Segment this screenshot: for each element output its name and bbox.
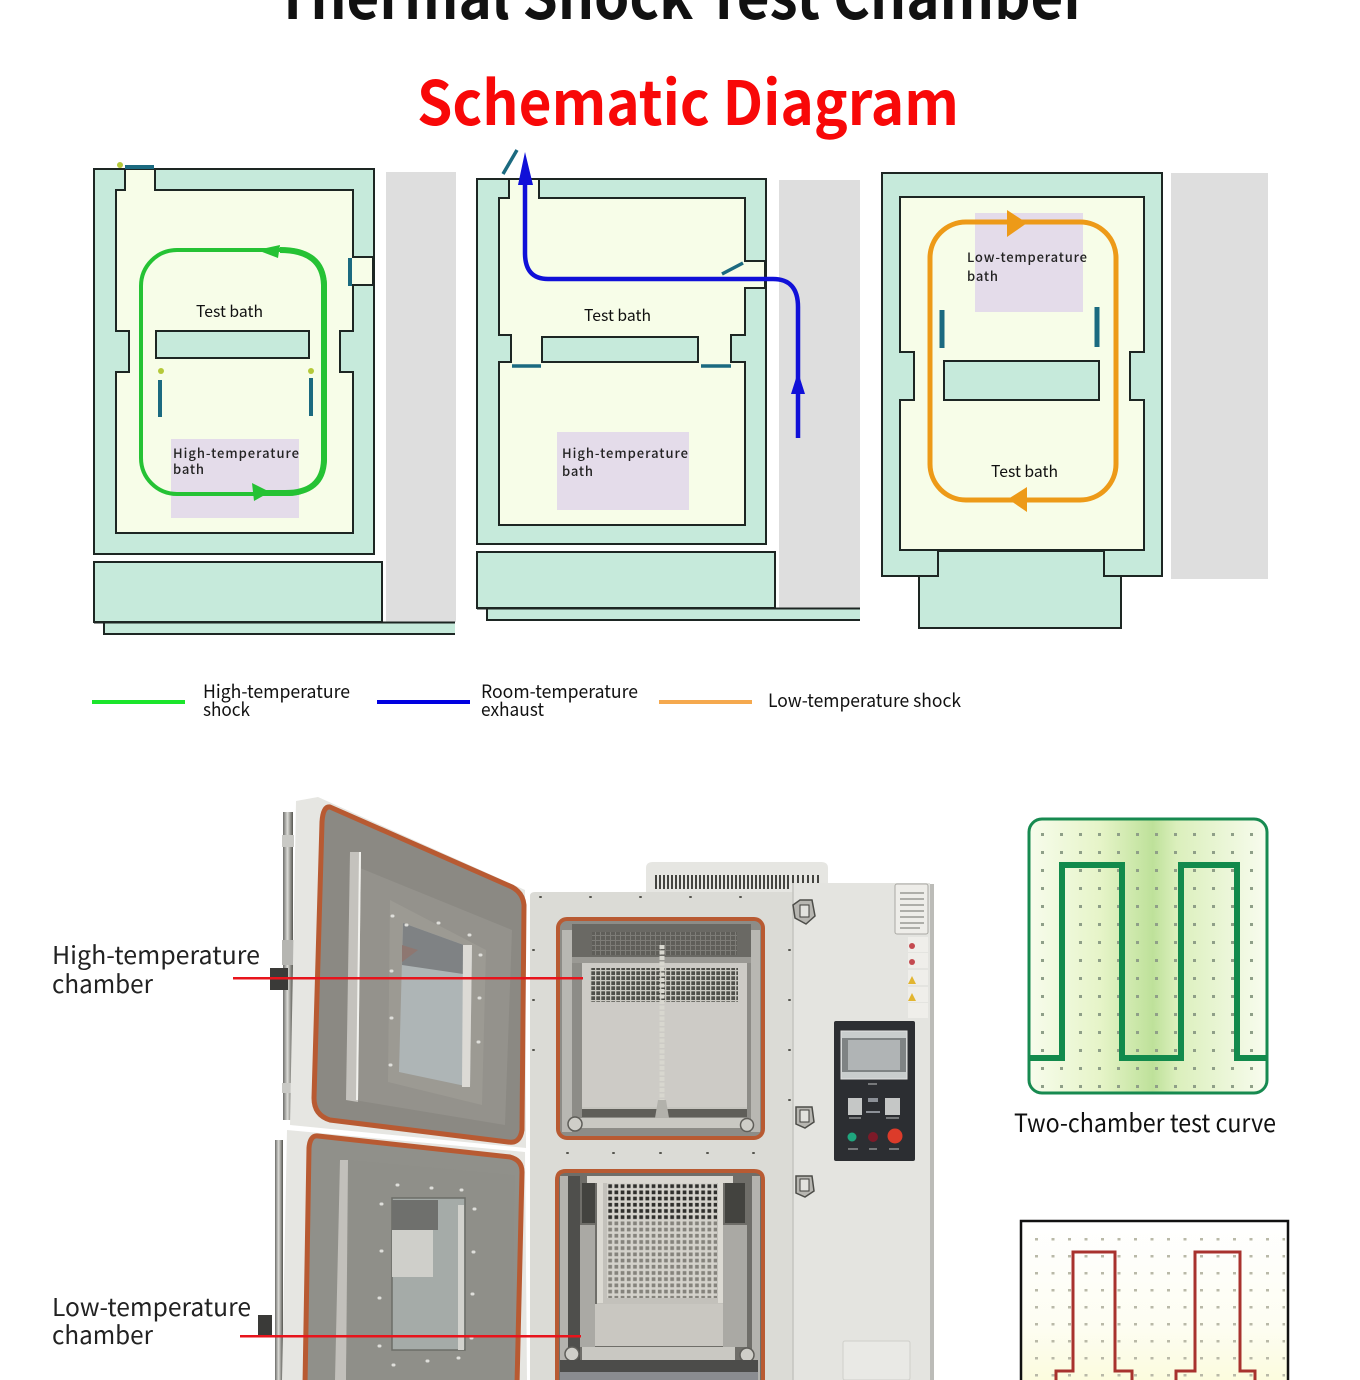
- legend: shock: [203, 696, 251, 722]
- label: high-temperature bath: High-temperature: [562, 443, 688, 462]
- callout: low-temperature chamber: chamber: [52, 1317, 153, 1352]
- legend: [92, 678, 962, 722]
- rating plate: [843, 1341, 910, 1380]
- hinges: [258, 812, 294, 1380]
- callout: high-temperature chamber: High-temperature: [52, 937, 260, 972]
- caption: two-chamber test curve: Two-chamber test curve: [1014, 1104, 1276, 1140]
- label: high-temperature bath: High-temperature: [173, 443, 299, 462]
- callout: high-temperature chamber: [52, 937, 583, 1001]
- lower chamber opening: [557, 1171, 763, 1380]
- cabinet body: [530, 883, 934, 1380]
- arrow: blue exhaust path: [518, 152, 805, 438]
- panel: high-temperature shock diagram: [94, 162, 456, 634]
- chart: two-chamber test curve: [1029, 819, 1267, 1093]
- arrow: orange airflow loop: [930, 210, 1116, 512]
- upper door: [290, 797, 526, 1148]
- arrow: green airflow loop: [141, 245, 325, 501]
- panel: room-temperature exhaust diagram: [477, 150, 860, 620]
- label: low-temperature bath: bath: [967, 266, 998, 285]
- label: high-temperature bath: bath: [562, 461, 593, 480]
- legend: exhaust: [481, 696, 544, 722]
- label: test bath: Test bath: [196, 298, 263, 322]
- label: test bath: Test bath: [991, 458, 1058, 482]
- legend: Low-temperature shock: [768, 687, 962, 713]
- label: high-temperature bath: bath: [173, 459, 204, 478]
- lower door: [282, 1130, 527, 1380]
- door latches: [793, 900, 815, 1197]
- label: test bath: Test bath: [584, 302, 651, 326]
- subtitle: schematic diagram: Schematic Diagram: [417, 54, 959, 143]
- upper chamber opening: [558, 919, 763, 1138]
- chart: three-chamber test curve: [1021, 1221, 1288, 1380]
- legend: High-temperature: [203, 678, 350, 704]
- callout: low-temperature chamber: Low-temperature: [52, 1289, 251, 1324]
- label: low-temperature bath: Low-temperature: [967, 247, 1087, 266]
- legend: Room-temperature: [481, 678, 638, 704]
- panel: low-temperature shock diagram: [882, 173, 1268, 628]
- control panel: [834, 1021, 915, 1161]
- top vent box: [646, 862, 828, 892]
- callout: low-temperature chamber: [52, 1289, 581, 1352]
- warning labels: [895, 884, 928, 1018]
- photo: thermal shock chamber with open doors: [258, 797, 934, 1380]
- callout: high-temperature chamber: chamber: [52, 966, 153, 1001]
